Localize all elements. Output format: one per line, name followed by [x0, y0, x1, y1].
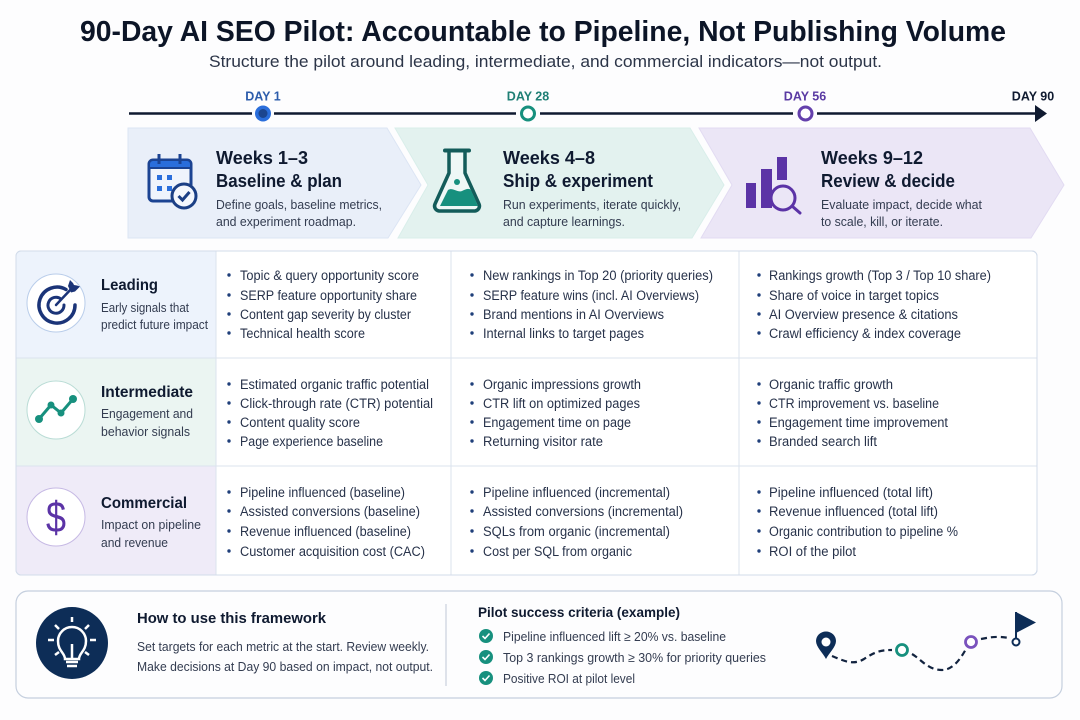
metrics: weeks 1-3: Click-through rate (CTR) potential — [240, 396, 433, 411]
icon: route to flag — [816, 612, 1036, 670]
metrics: weeks 1-3: Content gap severity by cluster — [240, 307, 411, 322]
title: 90-Day AI SEO Pilot: Accountable to Pipeline, Not Publishing Volume — [80, 16, 1006, 48]
metrics: weeks 9-12: Branded search lift — [769, 434, 877, 449]
metrics: weeks 4-8: Organic impressions growth — [483, 377, 641, 392]
metrics: weeks 4-8 — [470, 268, 713, 341]
metrics: weeks 9-12 — [757, 268, 991, 341]
heading: Weeks 1–3 — [216, 148, 308, 168]
metrics: weeks 9-12: CTR improvement vs. baseline — [769, 396, 939, 411]
icon: trend line — [27, 381, 85, 439]
marker: day 1: DAY 1 — [245, 90, 281, 104]
marker: day 56: DAY 56 — [784, 90, 826, 104]
metrics: weeks 1-3: Topic & query opportunity score — [240, 268, 419, 283]
subtitle: Structure the pilot around leading, intermediate, and commercial indicators—not output. — [209, 52, 882, 71]
icon: calendar — [149, 154, 196, 208]
timeline — [129, 90, 1054, 122]
metrics: weeks 4-8: New rankings in Top 20 (priority queries) — [483, 268, 713, 283]
row: commercial — [16, 466, 958, 574]
metrics: weeks 9-12: ROI of the pilot — [769, 544, 856, 559]
row description — [101, 518, 201, 550]
metrics: weeks 1-3: Customer acquisition cost (CAC) — [240, 544, 425, 559]
row description — [101, 407, 193, 439]
metrics: weeks 4-8: Pipeline influenced (incremental) — [483, 485, 670, 500]
metrics: weeks 4-8 — [470, 377, 641, 449]
description — [821, 197, 982, 229]
metrics: weeks 4-8: SERP feature wins (incl. AI Overviews) — [483, 288, 699, 303]
icon: target — [27, 274, 85, 332]
metrics: weeks 1-3: Assisted conversions (baseline) — [240, 504, 420, 519]
description: and experiment roadmap. — [216, 214, 356, 229]
row description: and revenue — [101, 536, 168, 550]
metrics: weeks 9-12 — [757, 485, 958, 559]
row description: Early signals that — [101, 301, 189, 315]
icon: bars and magnifier — [746, 157, 800, 213]
metrics: weeks 9-12: Crawl efficiency & index coverage — [769, 326, 961, 341]
row description — [101, 301, 208, 332]
metrics: weeks 4-8: Engagement time on page — [483, 415, 631, 430]
checklist: success criteria: Positive ROI at pilot level — [503, 671, 635, 686]
row: intermediate — [16, 358, 948, 466]
icon: dollar: $ — [46, 493, 66, 542]
panel: weeks 4-8: Ship & experiment — [503, 171, 653, 191]
metrics: weeks 1-3: Pipeline influenced (baseline) — [240, 485, 405, 500]
description: Evaluate impact, decide what — [821, 197, 982, 212]
row: leading — [16, 252, 991, 358]
panel: bottom notes — [16, 591, 1062, 698]
metrics: weeks 1-3: Page experience baseline — [240, 434, 383, 449]
heading: Weeks 4–8 — [503, 148, 595, 168]
metrics: weeks 1-3: Revenue influenced (baseline) — [240, 524, 411, 539]
row label: Commercial — [101, 495, 187, 512]
metrics: weeks 9-12: Pipeline influenced (total lift) — [769, 485, 933, 500]
text: how to use: Make decisions at Day 90 based on impact, not output. — [137, 659, 433, 674]
checklist: success criteria: Top 3 rankings growth ≥ 30% for priority queries — [503, 650, 766, 665]
marker: day 56 — [784, 90, 826, 120]
metrics: weeks 4-8: Internal links to target pages — [483, 326, 644, 341]
row description: Engagement and — [101, 407, 193, 421]
metrics: weeks 1-3: Estimated organic traffic potential — [240, 377, 429, 392]
metrics: weeks 1-3 — [227, 268, 419, 341]
panel: weeks 4-8 — [395, 128, 724, 238]
metrics: weeks 1-3 — [227, 377, 433, 449]
panel: weeks 9-12: Review & decide — [821, 171, 955, 191]
marker: day 1 — [245, 90, 281, 122]
description: Define goals, baseline metrics, — [216, 197, 382, 212]
metrics: weeks 1-3: Content quality score — [240, 415, 360, 430]
panel: weeks 1-3 — [128, 128, 421, 238]
icon: flask — [435, 150, 479, 211]
marker: day 90: DAY 90 — [1012, 90, 1054, 104]
icon: dollar — [27, 488, 85, 546]
metrics: weeks 9-12: Organic traffic growth — [769, 377, 893, 392]
panel: weeks 1-3: Baseline & plan — [216, 171, 342, 191]
metrics: weeks 4-8: SQLs from organic (incremental) — [483, 524, 670, 539]
text: how to use: Set targets for each metric at the start. Review weekly. — [137, 639, 429, 654]
icon: lightbulb — [36, 607, 108, 679]
metrics: weeks 4-8 — [470, 485, 683, 559]
metrics: weeks 4-8: CTR lift on optimized pages — [483, 396, 640, 411]
metrics: weeks 9-12: Revenue influenced (total lift) — [769, 504, 938, 519]
description: to scale, kill, or iterate. — [821, 214, 943, 229]
metrics: weeks 9-12: Organic contribution to pipeline % — [769, 524, 958, 539]
metrics: weeks 1-3: Technical health score — [240, 326, 365, 341]
metrics: weeks 9-12: Rankings growth (Top 3 / Top 10 share) — [769, 268, 991, 283]
metrics: weeks 1-3: SERP feature opportunity share — [240, 288, 417, 303]
row label: Intermediate — [101, 384, 193, 401]
metrics: weeks 4-8: Assisted conversions (incremental) — [483, 504, 683, 519]
description: Run experiments, iterate quickly, — [503, 197, 681, 212]
marker: day 28: DAY 28 — [507, 90, 549, 104]
metrics: weeks 9-12: Engagement time improvement — [769, 415, 948, 430]
row description: Impact on pipeline — [101, 518, 201, 532]
row label: Leading — [101, 277, 158, 294]
metrics: weeks 9-12: Share of voice in target topics — [769, 288, 939, 303]
description: and capture learnings. — [503, 214, 625, 229]
marker: day 28 — [507, 90, 549, 120]
heading: success criteria: Pilot success criteria (example) — [478, 604, 680, 620]
description — [503, 197, 681, 229]
metrics: weeks 9-12 — [757, 377, 948, 449]
panel: weeks 9-12 — [699, 128, 1064, 238]
metrics: weeks 9-12: AI Overview presence & citations — [769, 307, 958, 322]
metrics: weeks 4-8: Brand mentions in AI Overviews — [483, 307, 664, 322]
checklist: success criteria — [479, 629, 766, 686]
metrics matrix — [16, 251, 1037, 575]
metrics: weeks 4-8: Cost per SQL from organic — [483, 544, 632, 559]
row description: predict future impact — [101, 318, 208, 332]
text: how to use — [137, 639, 433, 674]
heading: how to use: How to use this framework — [137, 610, 327, 627]
heading: Weeks 9–12 — [821, 148, 923, 168]
metrics: weeks 1-3 — [227, 485, 425, 559]
description — [216, 197, 382, 229]
metrics: weeks 4-8: Returning visitor rate — [483, 434, 603, 449]
checklist: success criteria: Pipeline influenced lift ≥ 20% vs. baseline — [503, 629, 726, 644]
row description: behavior signals — [101, 425, 190, 439]
